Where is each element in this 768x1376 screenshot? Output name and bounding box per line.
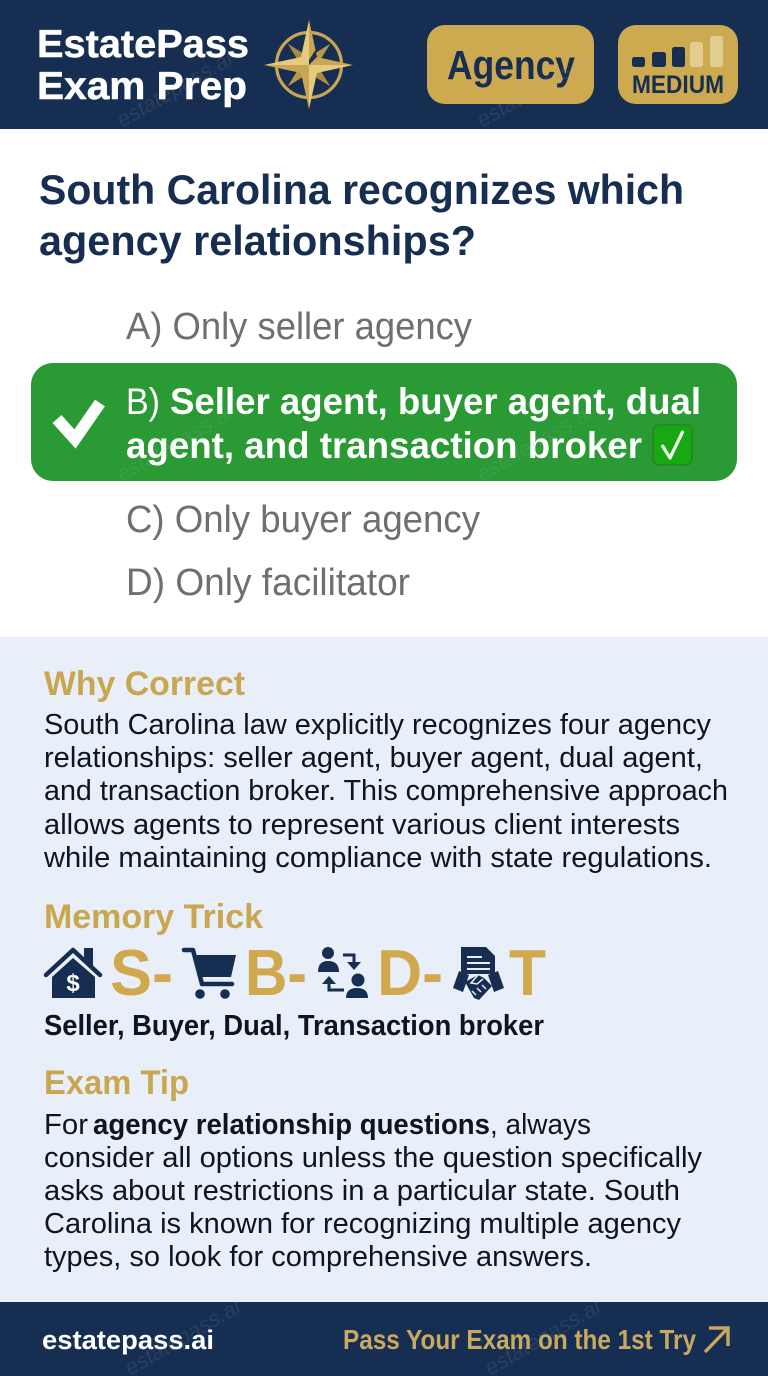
text: why correct body: relationships: seller agent, buyer agent, dual agent, xyxy=(44,742,703,774)
memory letter T: T xyxy=(509,936,546,1009)
watermarks xyxy=(112,45,606,1376)
memory letter D: D- xyxy=(377,936,443,1009)
badge: difficulty Medium: MEDIUM xyxy=(632,71,724,99)
text: why correct body xyxy=(43,709,728,874)
badge: difficulty Medium xyxy=(618,25,738,104)
text: exam tip body: consider all options unless the question specifically xyxy=(44,1142,703,1174)
heading: Why Correct: Why Correct xyxy=(44,665,245,703)
text: exam tip body: asks about restrictions in a particular state. South xyxy=(44,1175,680,1207)
text: exam tip body: agency relationship questions xyxy=(93,1109,490,1141)
badge: category Agency: Agency xyxy=(447,42,575,88)
watermarks: estatepass.ai xyxy=(472,399,598,486)
option B: correct answer: B) xyxy=(126,381,160,422)
option C: C) Only buyer agency xyxy=(126,499,480,541)
icon: document and handshake xyxy=(453,947,504,1000)
badge: category Agency xyxy=(427,25,594,104)
memory letter S: S- xyxy=(110,936,173,1009)
panel: explanation xyxy=(0,637,768,1302)
icon: two people exchanging xyxy=(318,947,368,998)
text: why correct body: South Carolina law explicitly recognizes four agency xyxy=(44,709,711,741)
icon: shopping cart xyxy=(184,950,236,999)
brand name: Exam Prep xyxy=(37,65,247,108)
icon: compass rose xyxy=(264,20,353,109)
text: exam tip body xyxy=(44,1109,703,1273)
icon: house with dollar: $ xyxy=(66,970,80,997)
heading: Memory Trick: Memory Trick xyxy=(44,898,263,936)
icon: arrow up right xyxy=(705,1328,728,1352)
text: why correct body: allows agents to represent various client interests xyxy=(44,809,680,841)
question heading: South Carolina recognizes which xyxy=(39,166,684,213)
text: why correct body: and transaction broker. This comprehensive approach xyxy=(44,775,728,807)
option B: correct answer: Seller agent, buyer agent, dual xyxy=(170,381,701,422)
question heading xyxy=(39,166,684,264)
footer tagline: Pass Your Exam on the 1st Try xyxy=(343,1324,696,1355)
memory letter B: B- xyxy=(245,936,307,1009)
text: exam tip body: types, so look for comprehensive answers. xyxy=(44,1241,592,1273)
text: exam tip body: , always xyxy=(490,1109,591,1141)
footer site name: estatepass.ai xyxy=(42,1325,214,1355)
header band xyxy=(0,0,768,129)
text: exam tip body: Carolina is known for recognizing multiple agency xyxy=(44,1208,681,1240)
text: why correct body: while maintaining compliance with state regulations. xyxy=(43,842,712,874)
watermarks: estatepass.ai xyxy=(112,45,238,132)
brand name xyxy=(37,23,249,108)
text: exam tip body: For xyxy=(44,1109,88,1141)
question heading: agency relationships? xyxy=(39,217,476,264)
icon: white check mark xyxy=(57,403,100,439)
option D: D) Only facilitator xyxy=(126,562,410,604)
brand name: EstatePass xyxy=(37,23,249,66)
option B: correct answer xyxy=(31,363,737,481)
option A: A) Only seller agency xyxy=(126,306,472,348)
watermarks: estatepass.ai xyxy=(472,45,598,132)
text: mnemonic key: Seller, Buyer, Dual, Transaction broker xyxy=(44,1010,544,1042)
option B: correct answer: agent, and transaction broker xyxy=(126,425,642,466)
watermarks: estatepass.ai xyxy=(112,399,238,486)
heading: Exam Tip: Exam Tip xyxy=(44,1064,189,1102)
icon: check emoji xyxy=(653,425,692,465)
footer band xyxy=(0,1302,768,1376)
icon: house with dollar xyxy=(46,948,100,998)
